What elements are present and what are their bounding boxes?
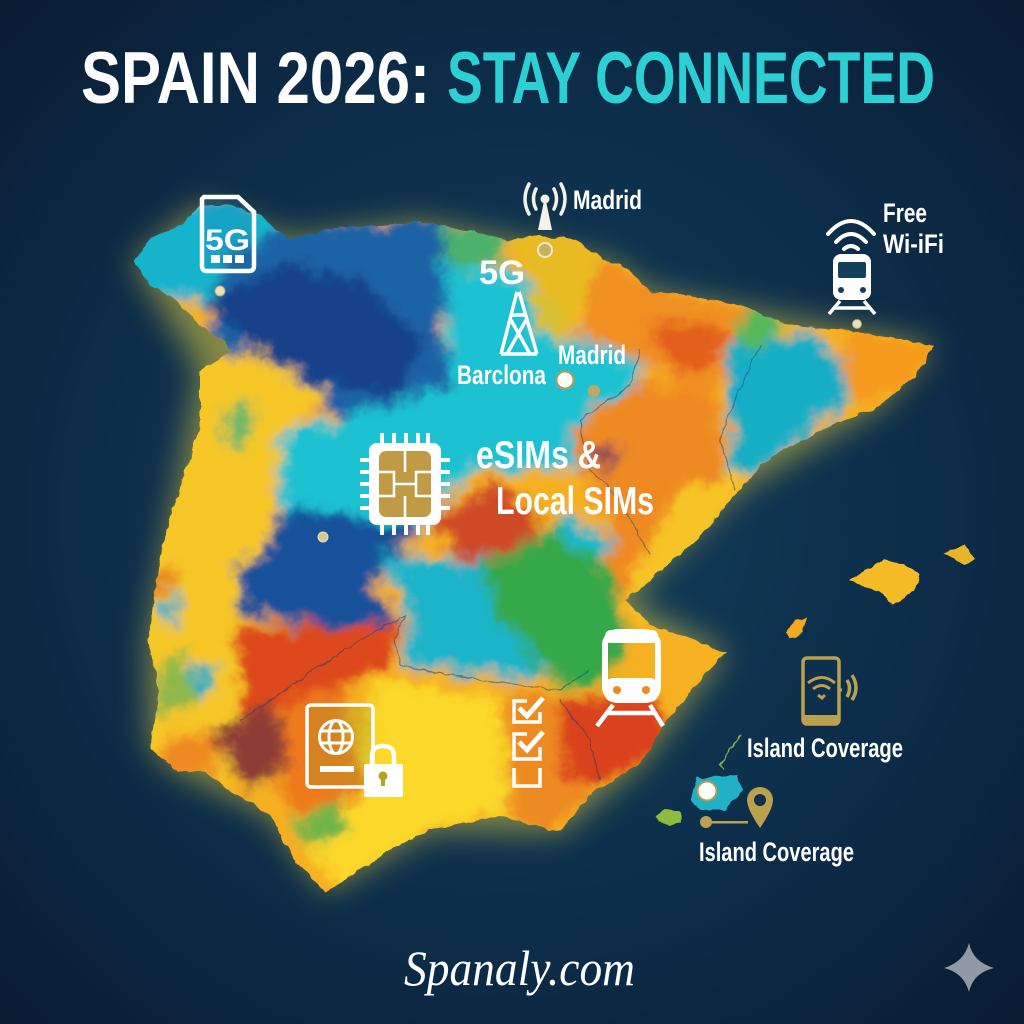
brand: Spanaly.com: Spanaly.com <box>404 940 635 996</box>
icon: sparkle <box>944 943 994 992</box>
Valencia yellow <box>625 470 750 620</box>
label: Madrid centre: Madrid <box>558 340 626 370</box>
icon: 5G SIM card: 5G <box>205 224 250 257</box>
icon: 5G mast <box>501 292 537 354</box>
islands <box>655 545 975 826</box>
label: eSIMs and Local SIMs <box>476 434 654 523</box>
yellow patches in teal <box>525 290 575 340</box>
Tenerife style island <box>692 775 742 810</box>
label: eSIMs and Local SIMs: eSIMs & <box>476 434 601 477</box>
label: eSIMs and Local SIMs: Local SIMs <box>496 480 654 523</box>
Galicia teal <box>110 200 285 300</box>
map pin: west <box>318 532 328 542</box>
icon: eSIM chip <box>360 433 450 535</box>
icon: train with Wi-Fi <box>828 221 875 314</box>
small green island <box>655 808 682 826</box>
icon: radio tower <box>525 184 565 230</box>
title <box>81 38 935 119</box>
label: Island Coverage upper: Island Coverage <box>747 733 903 763</box>
Mallorca <box>850 558 920 605</box>
map pins: centre <box>556 372 600 396</box>
centre red orange <box>430 480 560 575</box>
map glow <box>133 205 935 892</box>
region borders <box>240 345 760 780</box>
label: Free Wi-Fi <box>883 198 944 259</box>
label: Island Coverage lower: Island Coverage <box>699 837 854 867</box>
Aragon orange <box>570 380 725 610</box>
north east orange <box>580 260 760 400</box>
south centre teal <box>375 555 590 680</box>
Ibiza <box>785 618 807 640</box>
base yellow orange <box>148 204 934 892</box>
map marker: island <box>698 782 716 800</box>
label: Free Wi-Fi: Wi-iFi <box>883 229 944 259</box>
north centre yellow <box>514 235 601 315</box>
Menorca <box>943 545 975 565</box>
icon: location pin with route <box>700 787 773 828</box>
west dark blue <box>230 505 420 635</box>
south west red <box>235 620 405 720</box>
Catalonia coast orange <box>840 330 945 400</box>
central green <box>480 525 630 690</box>
title: SPAIN 2026: <box>81 38 430 119</box>
north blue <box>205 215 480 425</box>
icon: 5G SIM card <box>202 197 254 271</box>
south east orange and red <box>505 690 590 840</box>
icon: passport with globe and padlock <box>307 705 403 797</box>
centre teal <box>275 265 645 530</box>
label: Madrid top: Madrid <box>573 185 642 215</box>
map pin: Catalonia <box>852 320 862 328</box>
map of Spain and Portugal <box>134 204 934 892</box>
icon: train <box>597 630 663 726</box>
north coast green <box>440 225 510 270</box>
map pin: north <box>538 243 552 257</box>
icon: phone with Wi-Fi <box>803 658 856 724</box>
icon: checklist <box>514 698 543 786</box>
label: 5G: 5G <box>479 254 525 292</box>
Portugal yellow <box>140 350 325 790</box>
map pin: Galicia <box>215 286 225 296</box>
label: Free Wi-Fi: Free <box>883 198 927 228</box>
Catalonia teal and green <box>728 330 875 490</box>
label: Barcelona: Barclona <box>457 360 547 390</box>
Andalusia yellow <box>310 680 530 890</box>
